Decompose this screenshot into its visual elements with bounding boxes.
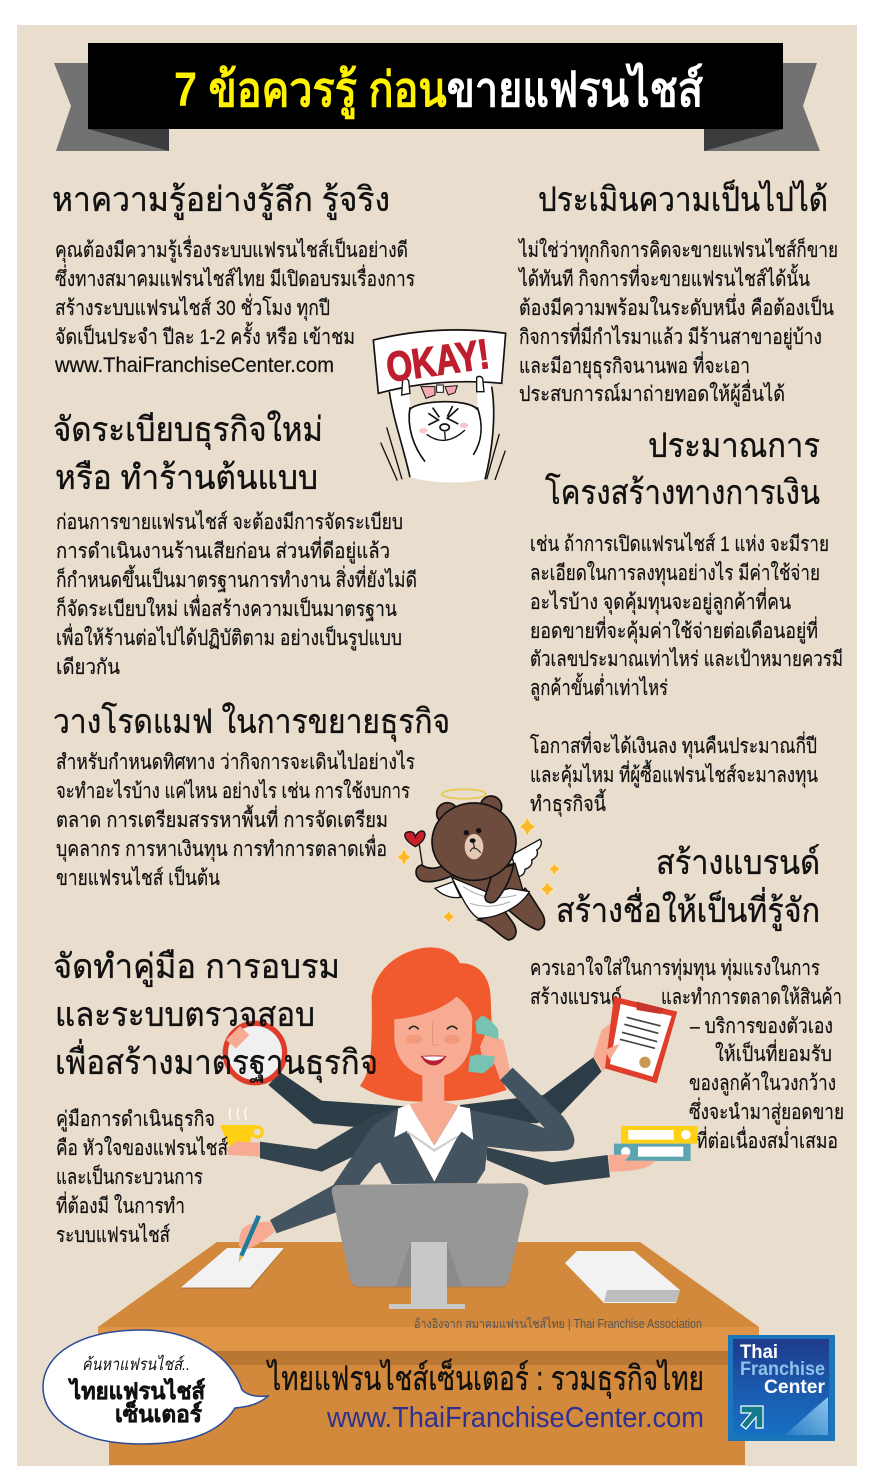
body text: คู่มือการดำเนินธุรกิจ	[56, 1108, 215, 1132]
heading: วางโรดแมฟ ในการขยายธุรกิจ	[53, 702, 450, 742]
body text: ประสบการณ์มาถ่ายทอดให้ผู้อื่นได้	[519, 379, 785, 407]
body text: ขายแฟรนไชส์ เป็นต้น	[56, 864, 220, 890]
logo: Thai Franchise Center: Franchise	[740, 1359, 825, 1380]
body text: ก็จัดระเบียบใหม่ เพื่อสร้างความเป็นมาตรฐาน	[56, 594, 397, 621]
section: financial estimate	[530, 427, 843, 817]
sticker: Brown bear cupid	[397, 789, 560, 940]
footer url: www.ThaiFranchiseCenter.com	[326, 1402, 704, 1434]
body text: จัดเป็นประจำ ปีละ 1-2 ครั้ง หรือ เข้าชม	[55, 322, 355, 349]
face	[394, 997, 472, 1077]
body text	[56, 1108, 228, 1247]
heading: และระบบตรวจสอบ	[55, 996, 315, 1034]
coffee cup	[220, 1108, 262, 1157]
heading: ประมาณการ	[648, 427, 820, 465]
body text: ที่ต้องมี ในการทำ	[56, 1191, 185, 1218]
body text: ยอดขายที่จะคุ้มค่าใช้จ่ายต่อเดือนอยู่ที่	[530, 616, 818, 644]
body text: โอกาสที่จะได้เงินลง ทุนคืนประมาณกี่ปี	[530, 731, 817, 759]
middle arms	[260, 1108, 397, 1172]
body text: สร้างแบรนด์	[530, 985, 622, 1009]
heading: เพื่อสร้างมาตรฐานธุรกิจ	[55, 1039, 378, 1083]
body text: บุคลากร การหาเงินทุน การทำการตลาดเพื่อ	[56, 834, 387, 862]
speech bubble: ไทยแฟรนไชส์	[67, 1377, 206, 1404]
body text: ลูกค้าขั้นต่ำเท่าไหร่	[530, 673, 668, 701]
section: manual and training	[53, 948, 378, 1247]
body text: การดำเนินงานร้านเสียก่อน ส่วนที่ดีอยู่แล้ว	[56, 536, 390, 564]
section: learn deeply	[52, 181, 415, 377]
body text: สร้างระบบแฟรนไชส์ 30 ชั่วโมง ทุกปี	[55, 293, 330, 321]
section: standardise business	[53, 410, 417, 679]
body text: จะทำอะไรบ้าง แค่ไหน อย่างไร เช่น การใช้งบการ	[56, 779, 410, 803]
heading: จัดระเบียบธุรกิจใหม่	[53, 410, 323, 450]
clock with hand	[225, 1023, 285, 1083]
collar	[394, 1104, 473, 1182]
heading: หาความรู้อย่างรู้ลึก รู้จริง	[52, 181, 390, 220]
body text	[530, 532, 843, 817]
OKAY text: OKAY!	[383, 330, 492, 391]
body text: – บริการของตัวเอง	[690, 1015, 833, 1038]
phone arm	[470, 1068, 574, 1152]
lower left arm	[270, 1157, 382, 1233]
body text: www.ThaiFranchiseCenter.com	[54, 354, 334, 377]
torso	[330, 1108, 487, 1190]
body text: ระบบแฟรนไชส์	[56, 1223, 170, 1247]
heading: โครงสร้างทางการเงิน	[545, 473, 820, 512]
illustration: multitasking woman	[220, 947, 698, 1288]
source credit: อ้างอิงจาก สมาคมแฟรนไชส์ไทย | Thai Franchise Association	[414, 1317, 702, 1331]
sticker: Cony holding OKAY sign	[373, 330, 506, 483]
paper stack	[565, 1251, 680, 1303]
clipboard with hand	[593, 997, 677, 1083]
bubble text: ค้นหาแฟรนไชส์..	[82, 1354, 190, 1374]
binders with hand	[608, 1126, 698, 1172]
title text: 7 ข้อควรรู้ ก่อนขายแฟรนไชส์	[174, 61, 704, 120]
body text: คุณต้องมีความรู้เรื่องระบบแฟรนไชส์เป็นอย่างดี	[55, 235, 408, 263]
body text	[530, 956, 844, 1153]
body text: คือ หัวใจของแฟรนไชส์	[56, 1136, 228, 1160]
neck and chest	[409, 1073, 458, 1146]
speech bubble: เซ็นเตอร์	[115, 1399, 203, 1427]
heading	[545, 427, 820, 512]
body text: ก็กำหนดขึ้นเป็นมาตรฐานการทำงาน สิ่งที่ยังไม่ดี	[56, 565, 417, 592]
body text: เดียวกัน	[56, 656, 120, 679]
body text	[517, 236, 838, 407]
phone	[468, 1016, 510, 1080]
body text: ซึ่งทางสมาคมแฟรนไชส์ไทย มีเปิดอบรมเรื่องการ	[55, 264, 415, 291]
upper back arms	[268, 1072, 410, 1127]
section: roadmap	[53, 702, 450, 890]
heading: ประเมินความเป็นไปได้	[538, 179, 828, 219]
footer headline: ไทยแฟรนไชส์เซ็นเตอร์ : รวมธุรกิจไทย	[266, 1358, 704, 1399]
heading	[53, 410, 323, 497]
left paper	[181, 1248, 285, 1289]
body text: ที่ต่อเนื่องสม่ำเสมอ	[696, 1126, 838, 1153]
body text: ให้เป็นที่ยอมรับ	[715, 1039, 832, 1066]
body text: และมีอายุธุรกิจนานพอ ที่จะเอา	[519, 351, 750, 379]
desk	[98, 1242, 759, 1465]
title ribbon	[54, 43, 820, 151]
body text: ทำธุรกิจนี้	[530, 789, 606, 817]
body text: เพื่อให้ร้านต่อไปได้ปฏิบัติตาม อย่างเป็นรูปแบบ	[56, 623, 402, 651]
speech bubble	[43, 1330, 268, 1444]
heading: จัดทำคู่มือ การอบรม	[53, 948, 340, 987]
monitor stand	[389, 1242, 465, 1309]
heading: หรือ ทำร้านต้นแบบ	[55, 459, 318, 497]
logo arrow	[741, 1406, 763, 1429]
body text: และเป็นกระบวนการ	[56, 1163, 203, 1189]
logo text: Thai	[740, 1342, 778, 1363]
heading: สร้างชื่อให้เป็นที่รู้จัก	[556, 887, 820, 931]
logo: Thai Franchise Center	[728, 1335, 835, 1441]
body text: สำหรับกำหนดทิศทาง ว่ากิจการจะเดินไปอย่างไร	[56, 750, 415, 774]
hand with pen	[239, 1215, 275, 1263]
heading	[53, 948, 378, 1083]
body text	[54, 235, 415, 377]
body text: ได้ทันที กิจการที่จะขายแฟรนไชส์ได้นั้น	[517, 264, 810, 291]
section: feasibility	[517, 179, 838, 407]
body text: ของลูกค้าในวงกว้าง	[689, 1071, 836, 1096]
body text: ตลาด การเตรียมสรรหาพื้นที่ การจัดเตรียม	[56, 805, 388, 832]
body text	[56, 510, 417, 679]
heading: สร้างแบรนด์	[656, 844, 820, 882]
computer monitor	[332, 1183, 528, 1288]
hair	[360, 947, 507, 1102]
logo: Thai Franchise Center: Center	[764, 1377, 826, 1398]
heading	[556, 844, 820, 931]
section: build the brand	[530, 844, 844, 1153]
body text	[56, 750, 415, 890]
body text: ก่อนการขายแฟรนไชส์ จะต้องมีการจัดระเบียบ	[56, 510, 403, 534]
body text: อะไรบ้าง จุดคุ้มทุนจะอยู่ลูกค้าที่คน	[530, 587, 791, 615]
